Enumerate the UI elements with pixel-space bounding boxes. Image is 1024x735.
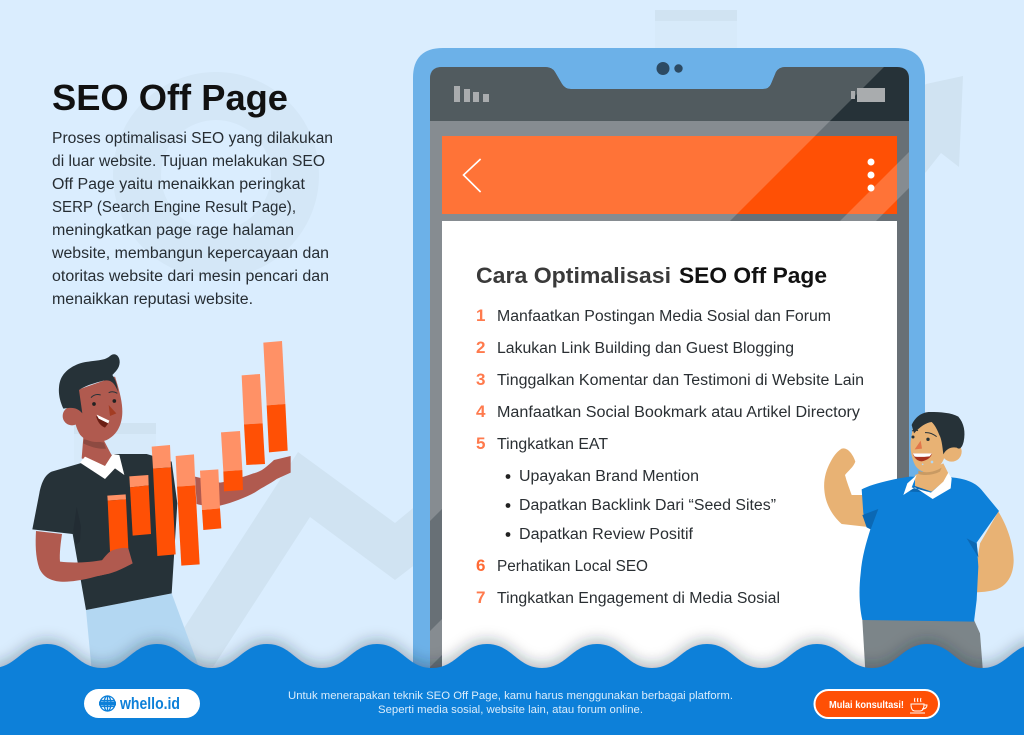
step 1: Manfaatkan Postingan Media Sosial dan Forum	[497, 308, 831, 325]
intro paragraph: Off Page yaitu menaikkan peringkat	[52, 176, 306, 193]
neck shadow	[83, 439, 106, 449]
collar	[80, 454, 124, 479]
shirt shade	[73, 507, 81, 545]
icon: battery	[851, 88, 885, 102]
intro paragraph: website, membangun kepercayaan dan	[51, 245, 329, 262]
icon: menu dots	[868, 158, 874, 192]
step 4: Manfaatkan Social Bookmark atau Artikel Directory	[497, 404, 860, 421]
bar 3	[152, 445, 176, 556]
nose	[915, 441, 922, 449]
icon: globe	[99, 696, 116, 711]
icon: signal	[454, 86, 489, 102]
eyes and brows	[911, 430, 937, 441]
face	[74, 377, 122, 442]
background decoration: rising arrow	[160, 76, 963, 667]
step 3: Tinggalkan Komentar dan Testimoni di Website Lain	[497, 372, 864, 389]
hair	[912, 412, 964, 454]
sweat drops	[922, 461, 933, 465]
step 6: Perhatikan Local SEO	[497, 558, 648, 575]
step 7: Tingkatkan Engagement di Media Sosial	[497, 590, 780, 607]
left arm	[36, 531, 120, 582]
eyes and brows	[91, 392, 117, 406]
title: SEO Off Page	[52, 77, 288, 118]
bent arm	[917, 512, 1014, 592]
intro paragraph: menaikkan reputasi website.	[52, 291, 253, 308]
list heading	[476, 263, 827, 288]
phone frame	[413, 48, 925, 680]
step 3: 3	[476, 370, 485, 389]
button label: Mulai konsultasi!	[829, 700, 904, 711]
trousers	[862, 620, 983, 677]
logo pill	[84, 689, 200, 718]
background decoration: bars	[74, 10, 737, 464]
list of steps	[476, 306, 864, 607]
bar 8	[263, 341, 288, 452]
intro paragraph: Proses optimalisasi SEO yang dilakukan	[52, 130, 333, 147]
consult button	[814, 690, 939, 718]
camera	[656, 62, 683, 75]
step 4: 4	[476, 402, 486, 421]
neck	[915, 463, 950, 492]
intro paragraph: di luar website. Tujuan melakukan SEO	[52, 153, 325, 170]
background decoration: ring	[137, 96, 295, 254]
footer text	[288, 690, 733, 716]
bar 4	[176, 454, 200, 566]
face	[911, 418, 945, 472]
sub-step: brand mention: Upayakan Brand Mention	[519, 468, 699, 485]
step 7: 7	[476, 588, 485, 607]
hand	[98, 548, 133, 576]
mouth	[913, 453, 932, 461]
shirt	[860, 477, 999, 622]
logo text: whello.id	[119, 695, 180, 713]
shirt	[32, 454, 177, 610]
nose	[109, 405, 116, 416]
bar 7	[242, 374, 265, 465]
ear	[942, 442, 962, 462]
sub-step: backlink: Dapatkan Backlink Dari “Seed Sites”	[519, 497, 776, 514]
raised arm	[824, 448, 872, 527]
illustration: man with raised fist	[824, 412, 1014, 677]
step 1: 1	[476, 306, 485, 325]
content panel	[442, 221, 897, 681]
step 2: 2	[476, 338, 485, 357]
intro paragraph: otoritas website dari mesin pencari dan	[52, 268, 329, 285]
bar 1	[107, 494, 128, 552]
trousers	[86, 593, 200, 670]
step 6: 6	[476, 556, 485, 575]
step 5: 5	[476, 434, 485, 453]
sub-step: review: Dapatkan Review Positif	[519, 526, 694, 543]
icon: back chevron	[464, 159, 481, 192]
intro paragraph: meningkatkan page rage halaman	[52, 222, 294, 239]
shirt shade	[862, 486, 978, 557]
collar	[903, 473, 952, 499]
step 5: Tingkatkan EAT	[497, 436, 609, 453]
footer wave band	[0, 644, 1024, 735]
bar 2	[129, 475, 151, 536]
list heading: Cara Optimalisasi	[476, 263, 671, 288]
wave shadow	[0, 640, 1024, 731]
intro paragraph	[51, 130, 333, 308]
neck shadow	[918, 468, 942, 475]
ear	[63, 407, 81, 425]
right arm	[195, 456, 291, 506]
hair	[59, 354, 120, 413]
mouth	[96, 415, 109, 428]
bar 6	[221, 431, 243, 491]
bar chart	[107, 341, 288, 566]
phone screen	[430, 67, 909, 668]
footer text: Untuk menerapakan teknik SEO Off Page, kamu harus menggunakan berbagai platform.	[288, 690, 733, 702]
bar 5	[200, 469, 221, 530]
intro paragraph: SERP (Search Engine Result Page),	[52, 199, 296, 216]
icon: coffee cup	[910, 698, 927, 713]
step 2: Lakukan Link Building dan Guest Blogging	[497, 340, 794, 357]
neck	[82, 437, 115, 467]
phone	[413, 48, 925, 668]
illustration: man holding bar chart	[32, 341, 291, 670]
list heading: SEO Off Page	[679, 263, 827, 288]
footer text: Seperti media sosial, website lain, atau forum online.	[378, 704, 643, 716]
